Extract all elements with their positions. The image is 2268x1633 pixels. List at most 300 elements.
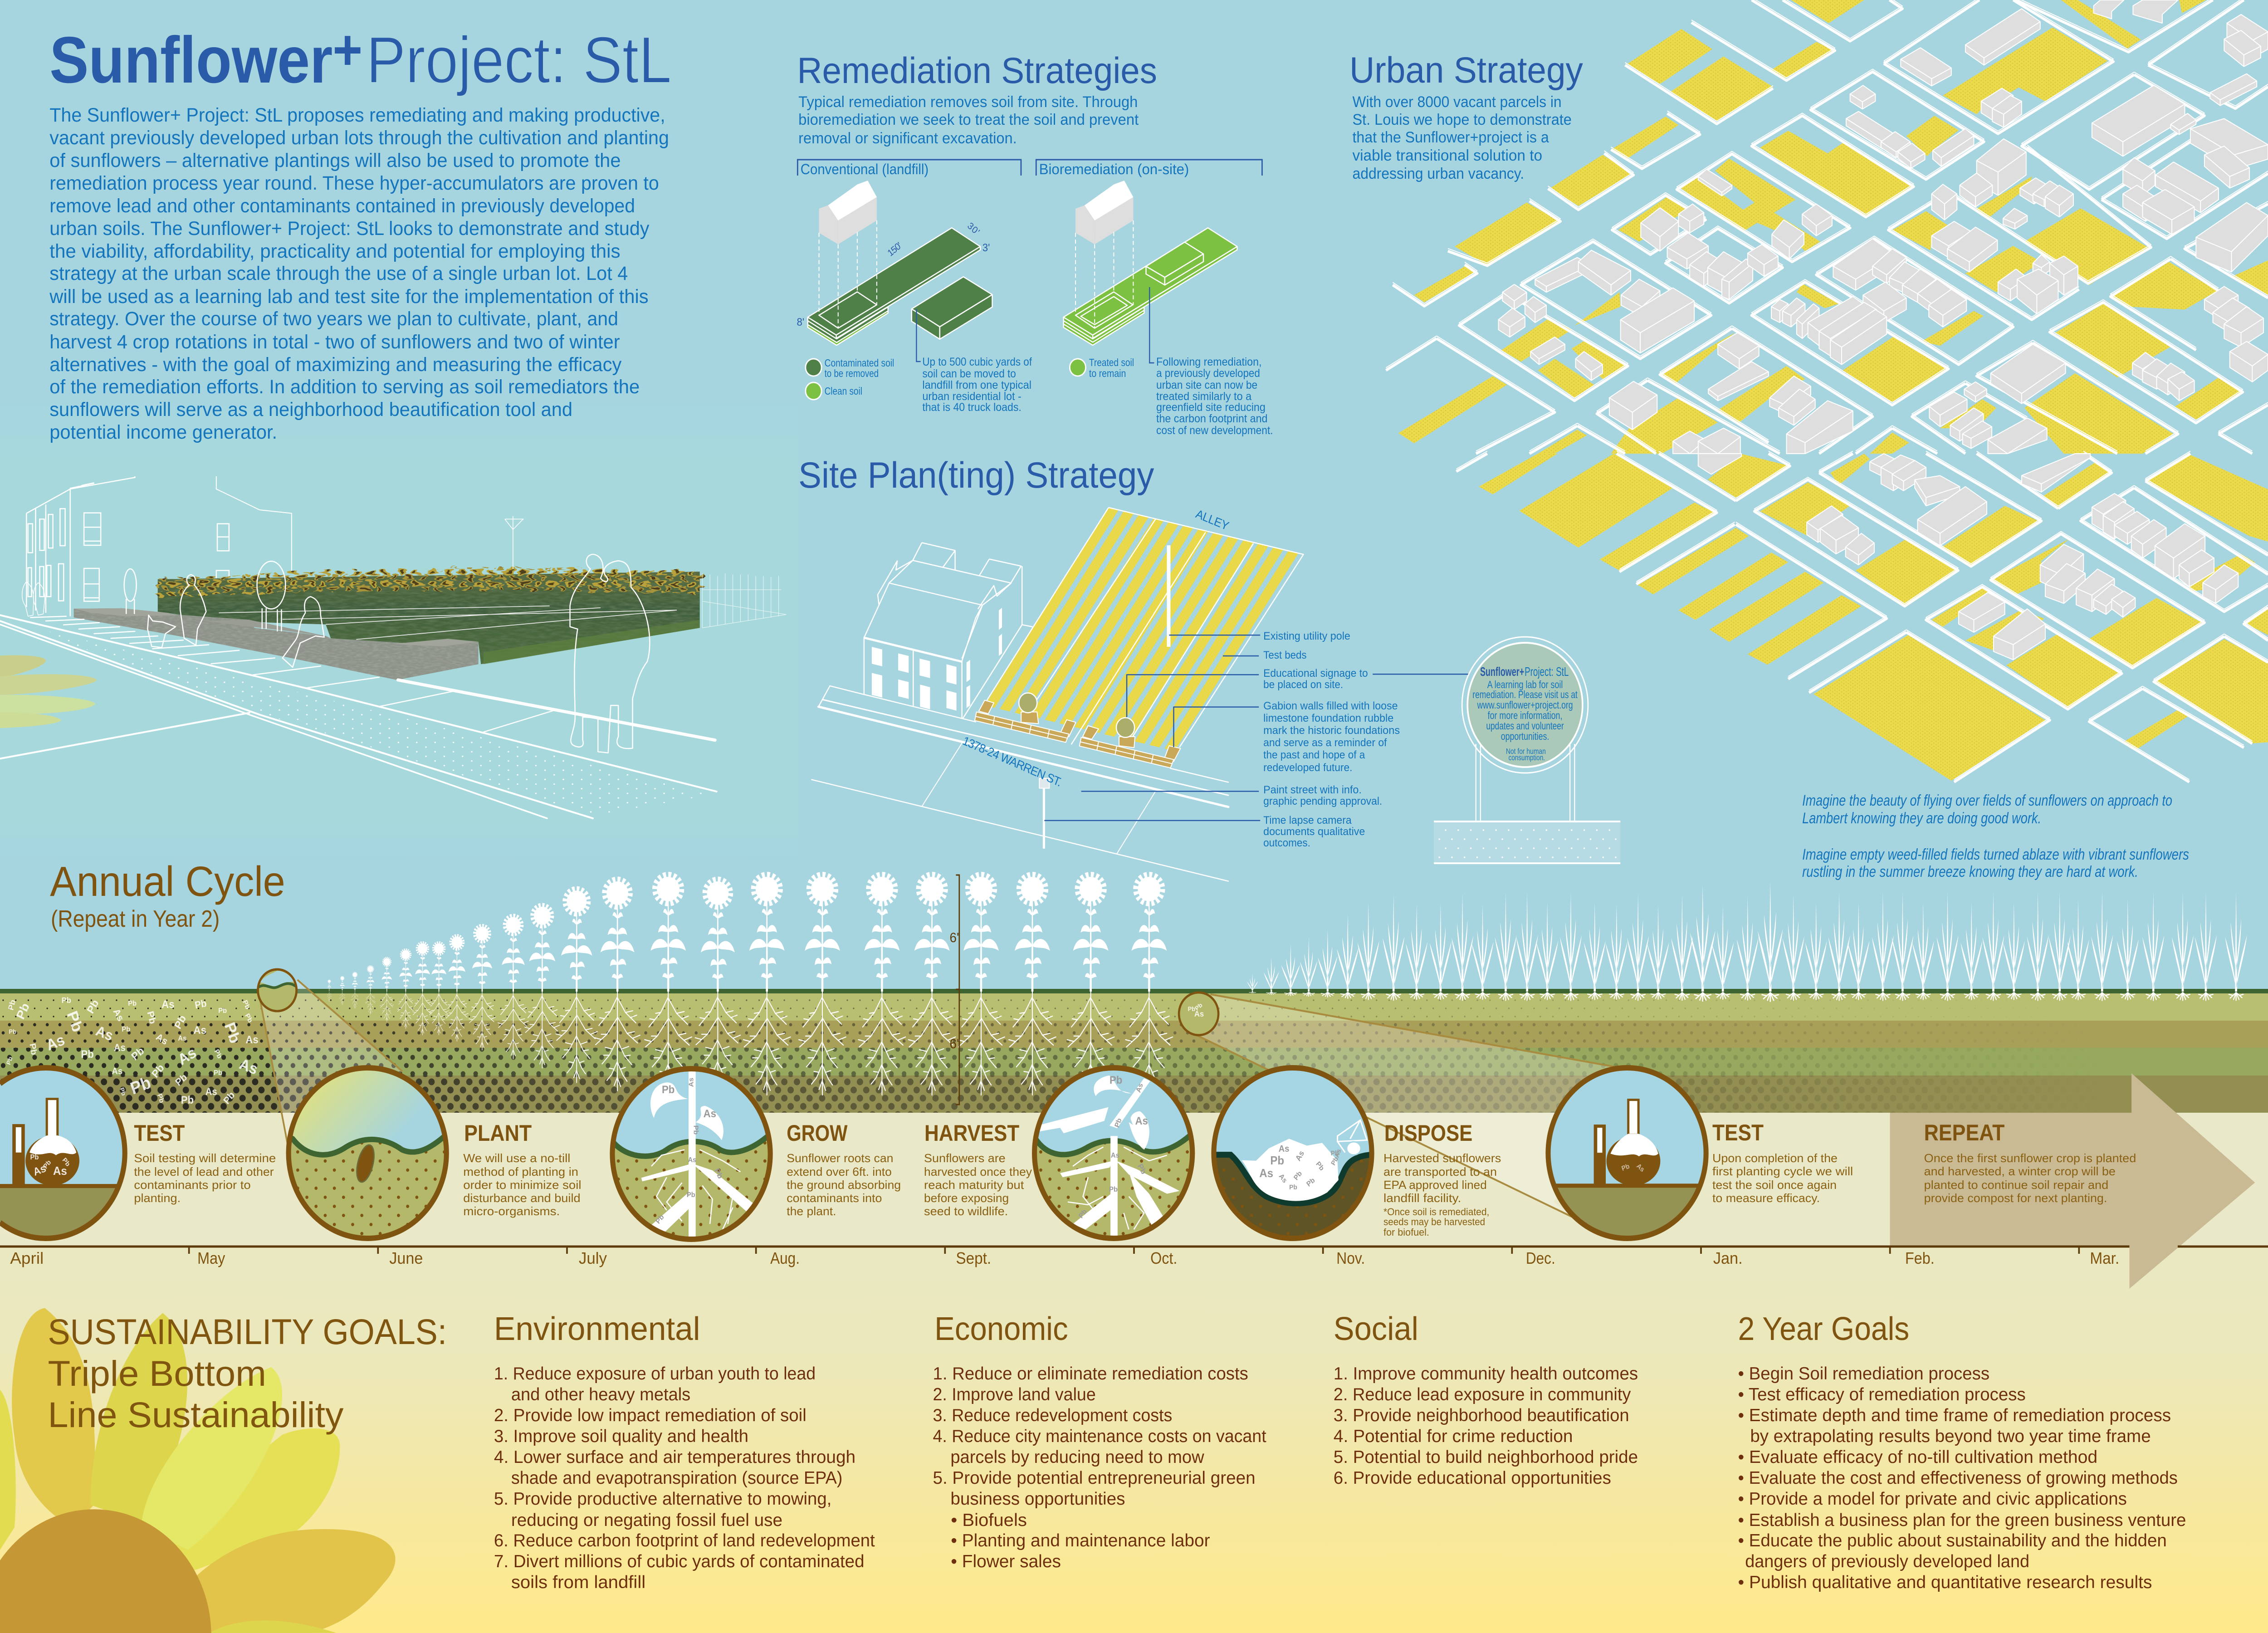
timeline: Feb. [1905, 1250, 1935, 1267]
dispose contaminant labels: Pb [1292, 1170, 1304, 1182]
site plan annotations: Paint street with info. [1263, 783, 1362, 796]
dispose contaminant labels: Pb [1330, 1155, 1340, 1167]
step 4 text: harvested once they [924, 1165, 1032, 1178]
intro text block: strategy at the urban scale through the use of a single urban lot. Lot 4 [49, 262, 628, 284]
gabion wall [74, 608, 479, 680]
flask contaminant labels: As [1635, 1162, 1646, 1173]
title: Project: StL [366, 23, 672, 97]
contaminant labels in soil: Pb [145, 1010, 158, 1025]
buildings north [1499, 0, 2268, 454]
test beds [985, 508, 1304, 751]
contaminant labels in soil: Pb [81, 1048, 94, 1060]
conventional dimensions: 150' [886, 240, 904, 259]
grow contaminant labels: Pb [662, 1083, 675, 1095]
map south section [1457, 451, 2268, 782]
contaminant labels in soil: Pb [156, 1093, 166, 1104]
following remediation callout: urban site can now be [1156, 379, 1257, 391]
column: two year goals: • Publish qualitative and quantitative research results [1738, 1572, 2152, 1592]
site plan annotations: limestone foundation rubble [1263, 712, 1393, 724]
site plan annotations: Gabion walls filled with loose [1263, 699, 1398, 712]
timeline: Sept. [956, 1250, 991, 1267]
following remediation callout: treated similarly to a [1156, 390, 1252, 403]
remediation intro text: Typical remediation removes soil from site. Through [798, 93, 1138, 110]
column: environmental: 2. Provide low impact remediation of soil [494, 1405, 807, 1425]
intro text block: urban soils. The Sunflower+ Project: StL looks to demonstrate and study [49, 217, 650, 239]
intro text block: will be used as a learning lab and test site for the implementation of this [49, 285, 649, 307]
step 6 text: TEST [1712, 1120, 1764, 1145]
column: economic: business opportunities [950, 1489, 1125, 1508]
step 7 text [1924, 1120, 2136, 1205]
column: economic: 5. Provide potential entrepreneurial green [933, 1468, 1256, 1487]
leader lines [1044, 635, 1468, 821]
sign text: for more information, [1488, 709, 1562, 721]
contaminant labels in soil: Pb [128, 1000, 137, 1007]
grow contaminant labels: Pb [713, 1167, 725, 1180]
band for cycle steps [0, 1113, 2268, 1247]
flask contaminant labels: Pb [42, 1159, 53, 1170]
small sample circle two: Pb [1194, 1002, 1204, 1012]
conventional dimensions: 30' [965, 220, 981, 237]
site plan annotations: Test beds [1263, 649, 1307, 661]
contaminant labels in soil: Pb [172, 1013, 188, 1031]
column: social: Social [1334, 1310, 1418, 1347]
sign text: updates and volunteer [1486, 720, 1564, 732]
intro text block: The Sunflower+ Project: StL proposes remediating and making productive, [49, 104, 665, 126]
site plan annotations: outcomes. [1263, 836, 1310, 849]
contaminant labels in soil: Pb [218, 1007, 227, 1015]
flask and test tube [13, 1099, 79, 1186]
intro text block: harvest 4 crop rotations in total - two of sunflowers and two of winter [49, 331, 620, 352]
column: economic: 2. Improve land value [933, 1384, 1096, 1404]
column: environmental: Environmental [494, 1310, 700, 1347]
conventional dimensions: 8' [797, 316, 804, 328]
step 3 text: extend over 6ft. into [787, 1165, 892, 1178]
utility pole [1167, 545, 1170, 647]
sunflower growth sequence [327, 877, 1173, 1095]
legend bioremediation [1070, 357, 1134, 379]
contaminant labels in soil: As [94, 1022, 115, 1044]
step 5 text: Harvested sunflowers [1383, 1152, 1501, 1165]
small sample circle two: As [1194, 1009, 1204, 1018]
house [819, 181, 877, 328]
dispose contaminant labels: Pb [1331, 1150, 1339, 1157]
vacant lots south [1479, 454, 2268, 781]
step 4 text: seed to wildlife. [924, 1205, 1008, 1218]
grow contaminant labels: Pb [692, 1125, 699, 1134]
legend conventional [806, 357, 894, 400]
flask contaminant labels: As [32, 1162, 48, 1178]
harvest contaminant labels: Pb [1110, 1074, 1122, 1086]
step 5 text: *Once soil is remediated, [1383, 1207, 1489, 1217]
contaminant labels in soil: As [154, 1032, 170, 1047]
time lapse camera [1039, 778, 1049, 849]
step 4 text: before exposing [924, 1192, 1009, 1205]
column: two year goals: • Test efficacy of remediation process [1738, 1384, 2026, 1404]
step 7 text: Once the first sunflower crop is planted [1924, 1152, 2136, 1165]
column: economic: • Flower sales [951, 1551, 1061, 1571]
harvest contaminant labels: As [1135, 1115, 1148, 1127]
step 2: plant circle [285, 1068, 448, 1243]
step 5 text: for biofuel. [1383, 1227, 1429, 1238]
timeline: Oct. [1150, 1250, 1177, 1267]
background teal wash [0, 399, 798, 862]
legend conventional: to be removed [825, 367, 879, 379]
column: social: 1. Improve community health outcomes [1334, 1364, 1638, 1383]
conventional dimensions [797, 220, 990, 328]
contaminant labels in soil: Pb [194, 998, 207, 1011]
step 2 text: disturbance and build [463, 1192, 581, 1205]
contaminant labels in soil: Pb [149, 1061, 166, 1080]
intro text block: sunflowers will serve as a neighborhood beautification tool and [49, 398, 572, 420]
street perspective illustration [0, 476, 786, 818]
dispose contaminant labels: As [1334, 1148, 1343, 1159]
column: economic [933, 1310, 1266, 1571]
urban strategy text: addressing urban vacancy. [1352, 165, 1524, 182]
timeline: June [389, 1250, 423, 1267]
repeat arrow [1890, 1073, 2255, 1289]
landfill callout: Up to 500 cubic yards of [922, 356, 1032, 368]
planter base [1434, 821, 1620, 863]
contaminant labels in soil: As [205, 1086, 217, 1097]
field guide lines [219, 606, 677, 640]
soil slab layers [808, 228, 980, 345]
sign text [1472, 665, 1578, 762]
winter crop sequence [1247, 881, 2247, 1001]
column: economic: • Biofuels [951, 1510, 1027, 1530]
urban axonometric map [1386, 0, 2268, 782]
legend bioremediation: to remain [1089, 367, 1126, 379]
dispose contaminant labels: Pb [1305, 1176, 1316, 1188]
contaminant labels in soil: Pb [128, 1073, 153, 1098]
urban strategy text: With over 8000 vacant parcels in [1352, 93, 1562, 110]
column: social: 5. Potential to build neighborhood pride [1334, 1447, 1638, 1467]
harvest contaminant labels: Pb [1077, 1208, 1089, 1220]
harvest contaminant labels: As [1111, 1152, 1119, 1159]
column: social: 3. Provide neighborhood beautification [1334, 1405, 1629, 1425]
street lines [811, 625, 1228, 881]
fence of distant plants [702, 573, 786, 628]
contaminant labels in soil: As [114, 1042, 126, 1053]
imagine text: Imagine the beauty of flying over fields of sunflowers on approach to [1802, 792, 2172, 809]
sign text: Not for human [1506, 746, 1546, 756]
column: economic: 4. Reduce city maintenance costs on vacant [933, 1426, 1266, 1446]
remediation intro text: bioremediation we seek to treat the soil and prevent [798, 111, 1139, 128]
urban strategy text: St. Louis we hope to demonstrate [1352, 111, 1572, 128]
column: economic: 1. Reduce or eliminate remediation costs [933, 1364, 1248, 1383]
background sand gradient [0, 1113, 2268, 1633]
educational signs [1019, 693, 1135, 748]
magnifier cone: soil sample to plant [259, 980, 402, 1156]
ground [0, 1188, 115, 1236]
column: two year goals: • Evaluate the cost and effectiveness of growing methods [1738, 1468, 2178, 1487]
landfill callout: urban residential lot - [922, 390, 1022, 403]
timeline: Jan. [1713, 1250, 1743, 1267]
step 7 text: and harvested, a winter crop will be [1924, 1165, 2116, 1178]
sidewalk dots [15, 623, 713, 815]
column: two year goals: • Educate the public about sustainability and the hidden [1738, 1530, 2167, 1550]
title [49, 18, 672, 97]
timeline: Aug. [770, 1250, 800, 1267]
column: environmental [494, 1310, 875, 1592]
contaminant labels in soil: Pb [129, 1044, 146, 1063]
timeline: Dec. [1526, 1250, 1555, 1267]
sign text: remediation. Please visit us at [1472, 689, 1578, 700]
step 5: dispose circle [1213, 1068, 1372, 1246]
step 6 text: to measure efficacy. [1712, 1192, 1820, 1205]
contaminant labels in soil: As [194, 1024, 206, 1036]
remediation intro text [798, 93, 1139, 147]
sign illustration [1462, 637, 1588, 821]
step 5 text: landfill facility. [1383, 1192, 1461, 1205]
contaminant labels in soil: As [112, 1066, 122, 1076]
urban strategy text [1352, 93, 1572, 182]
contaminant labels in soil [5, 995, 260, 1106]
contaminant labels in soil: As [175, 1043, 199, 1068]
contaminant labels in soil: Pb [28, 1043, 39, 1056]
harvest contaminant labels: Pb [1136, 1162, 1149, 1176]
intro text block: strategy. Over the course of two years we plan to cultivate, plant, and [49, 308, 618, 329]
contaminant labels in soil: As [178, 1035, 186, 1042]
height dimension: 6' [950, 930, 959, 945]
intro text block: the viability, affordability, practicality and potential for employing this [49, 240, 621, 262]
timeline: April [10, 1250, 44, 1267]
contaminant labels in soil: Pb [6, 999, 17, 1011]
soil pile returned [1146, 242, 1203, 285]
step 4 text: HARVEST [924, 1120, 1019, 1146]
excavated soil block [912, 277, 992, 339]
magnifier cone: harvested soil to test [1198, 994, 1618, 1219]
column: social: 2. Reduce lead exposure in community [1334, 1384, 1631, 1404]
site plan annotations: the past and hope of a [1263, 748, 1365, 761]
contaminant labels in soil: Pb [62, 995, 71, 1005]
sign text: consumption. [1508, 753, 1545, 762]
step 1 text: contaminants prior to [134, 1178, 251, 1192]
contaminant labels in soil: Pb [5, 1056, 14, 1066]
heading: annual cycle: Annual Cycle [50, 858, 285, 905]
site plan annotations: be placed on site. [1263, 678, 1343, 690]
street outlines south [1457, 451, 2268, 782]
sunflower centre [0, 1509, 211, 1633]
grow contaminant labels [655, 1078, 725, 1225]
harvest contaminant labels [1077, 1074, 1149, 1220]
grow contaminant labels: Pb [655, 1213, 665, 1225]
contaminant labels in soil: Pb [241, 999, 251, 1011]
landfill callout: landfill from one typical [922, 379, 1031, 391]
signs and utility pole [124, 516, 523, 631]
step 3 text [787, 1120, 901, 1218]
step 3 text: Sunflower roots can [787, 1152, 893, 1165]
timeline: May [197, 1250, 225, 1267]
dispose contaminant labels: As [1259, 1167, 1273, 1180]
step 7 text: REPEAT [1924, 1120, 2004, 1145]
intro text block: potential income generator. [49, 421, 277, 443]
following remediation callout: cost of new development. [1156, 424, 1273, 437]
contaminant labels in soil: Pb [181, 1094, 194, 1106]
vacant lots north [1398, 0, 2268, 454]
step 6 text: test the soil once again [1712, 1178, 1837, 1192]
contaminant labels in soil: Pb [213, 1048, 223, 1060]
heading: annual cycle: (Repeat in Year 2) [51, 905, 220, 932]
legend conventional: Contaminated soil [825, 357, 894, 369]
following remediation callout [1149, 287, 1273, 437]
step 5 text: EPA approved lined [1383, 1178, 1487, 1192]
column: social [1334, 1310, 1638, 1487]
dispose contaminant labels: As [1277, 1172, 1289, 1184]
building outline [26, 476, 292, 616]
site plan annotations [1263, 630, 1400, 849]
intro text block: vacant previously developed urban lots through the cultivation and planting [49, 127, 669, 148]
site plan annotations: Educational signage to [1263, 667, 1368, 679]
street outlines north [1386, 0, 2268, 454]
title: + [332, 18, 362, 82]
step 3: grow circle [611, 1069, 771, 1246]
step 6: test circle [1546, 1068, 1709, 1242]
dispose contaminant labels: As [1294, 1149, 1306, 1163]
buildings south [1698, 454, 2238, 660]
flask contaminant labels: Pb [1621, 1163, 1631, 1173]
title: Sunflower [49, 23, 332, 97]
soil pile [1242, 1139, 1339, 1201]
column: environmental: 7. Divert millions of cubic yards of contaminated [494, 1551, 865, 1571]
intro text block: remediation process year round. These hyper-accumulators are proven to [49, 172, 659, 194]
column: two year goals: 2 Year Goals [1738, 1310, 1909, 1347]
heading: annual cycle [50, 858, 285, 932]
grow contaminant labels: Pb [687, 1191, 695, 1199]
brackets and sub-headings [797, 160, 1262, 177]
step 2 text [463, 1120, 581, 1218]
harvest contaminant labels: As [1135, 1082, 1145, 1094]
site plan drawing [811, 508, 1468, 881]
sign text: Sunflower+ [1480, 665, 1524, 679]
column: environmental: reducing or negating fossil fuel use [511, 1510, 782, 1530]
step 5 text: are transported to an [1383, 1165, 1497, 1178]
dispose contaminant labels: Pb [1270, 1154, 1284, 1167]
following remediation callout: the carbon footprint and [1156, 412, 1267, 425]
column: two year goals: • Evaluate efficacy of no-till cultivation method [1738, 1447, 2097, 1467]
step 1 text: Soil testing will determine [134, 1152, 276, 1165]
treated soil slab [1064, 228, 1237, 345]
column: environmental: 5. Provide productive alternative to mowing, [494, 1489, 831, 1508]
faint flower petals [0, 655, 97, 728]
dispose contaminant labels: Pb [1289, 1184, 1297, 1191]
sign text: opportunities. [1501, 730, 1549, 742]
column: economic: parcels by reducing need to mow [950, 1447, 1205, 1467]
step 3 text: the ground absorbing [787, 1178, 901, 1192]
heading: site planting strategy: Site Plan(ting) Strategy [798, 454, 1154, 496]
following remediation callout: greenfield site reducing [1156, 401, 1266, 414]
seed [353, 1143, 377, 1184]
harvest contaminant labels: Pb [1109, 1186, 1118, 1193]
step 2 text: micro-organisms. [463, 1205, 560, 1218]
dispose contaminant labels [1259, 1144, 1343, 1191]
sustainability heading: Triple Bottom [48, 1354, 266, 1394]
alley label: ALLEY [1194, 507, 1231, 533]
dispose contaminant labels: As [1279, 1144, 1289, 1154]
flask contaminant labels: As [53, 1164, 67, 1178]
column: economic: • Planting and maintenance labor [951, 1530, 1210, 1550]
landfill callout [916, 309, 1032, 414]
column: social: 6. Provide educational opportunities [1334, 1468, 1611, 1487]
step 5 text: DISPOSE [1384, 1120, 1472, 1146]
step 3 text: the plant. [787, 1205, 836, 1218]
site plan annotations: and serve as a reminder of [1263, 736, 1387, 748]
contaminant labels in soil: As [111, 1007, 126, 1023]
brackets and sub-headings: Bioremediation (on-site) [1039, 161, 1189, 177]
column: environmental: 4. Lower surface and air temperatures through [494, 1447, 855, 1467]
step 6 text: Upon completion of the [1712, 1152, 1838, 1165]
timeline: Mar. [2090, 1250, 2119, 1267]
landfill callout: soil can be moved to [922, 367, 1016, 380]
column: social: 4. Potential for crime reduction [1334, 1426, 1573, 1446]
house windows [872, 608, 1002, 711]
contaminant labels in soil: Pb [222, 1090, 237, 1106]
landfill callout: that is 40 truck loads. [922, 401, 1022, 414]
sign text: Project: StL [1525, 665, 1569, 679]
height dimension [950, 875, 959, 1105]
contaminant labels in soil: Pb [85, 997, 101, 1016]
flask contaminant labels: Pb [30, 1154, 39, 1161]
step 1 text: planting. [134, 1192, 181, 1205]
flask contaminant labels [30, 1154, 71, 1178]
timeline: July [579, 1250, 607, 1267]
column: environmental: 6. Reduce carbon footprint of land redevelopment [494, 1530, 875, 1550]
site plan annotations: redeveloped future. [1263, 761, 1352, 773]
dispose contaminant labels: Pb [1314, 1160, 1325, 1172]
imagine text: Lambert knowing they are doing good work. [1802, 809, 2041, 826]
step 1 text [134, 1120, 276, 1205]
step 7 text: planted to continue soil repair and [1924, 1178, 2108, 1192]
site plan annotations: graphic pending approval. [1263, 795, 1382, 807]
column: environmental: and other heavy metals [511, 1384, 690, 1404]
contaminant labels in soil: Pb [174, 1072, 189, 1088]
column: two year goals: • Establish a business plan for the green business venture [1738, 1510, 2186, 1530]
contaminant labels in soil: Pb [122, 1026, 130, 1033]
step 3 text: contaminants into [787, 1192, 882, 1205]
step 4 text: Sunflowers are [924, 1152, 1006, 1165]
contaminant labels in soil: Pb [64, 1009, 86, 1034]
column: two year goals [1738, 1310, 2186, 1592]
legend bioremediation: Treated soil [1089, 357, 1134, 368]
following remediation callout: a previously developed [1156, 367, 1260, 380]
step 2 text: We will use a no-till [463, 1152, 570, 1165]
step 2 text: PLANT [464, 1120, 532, 1146]
sign text: www.sunflower+project.org [1477, 699, 1573, 711]
step 4 text [924, 1120, 1032, 1218]
contaminant labels in soil: Pb [243, 1012, 254, 1024]
step 5 text [1383, 1120, 1501, 1238]
site plan annotations: mark the historic foundations [1263, 724, 1400, 736]
legend conventional: Clean soil [825, 385, 862, 397]
conventional dimensions: 3' [982, 241, 990, 254]
contaminant labels in soil: As [161, 998, 175, 1010]
step 1 text: TEST [134, 1120, 185, 1146]
step 2 text: method of planting in [463, 1165, 578, 1178]
column: economic: 3. Reduce redevelopment costs [933, 1405, 1172, 1425]
column: environmental: soils from landfill [511, 1572, 645, 1592]
map north section [1386, 0, 2268, 454]
urban strategy text: viable transitional solution to [1352, 147, 1542, 164]
intro text block: remove lead and other contaminants contained in previously developed [49, 195, 635, 216]
intro text block: of the remediation efforts. In addition to serving as soil remediators the [49, 376, 640, 397]
timeline: Nov. [1336, 1250, 1365, 1267]
imagine text: Imagine empty weed-filled fields turned ablaze with vibrant sunflowers [1802, 846, 2189, 863]
column: environmental: shade and evapotranspiration (source EPA) [511, 1468, 842, 1487]
column: two year goals: by extrapolating results beyond two year time frame [1750, 1426, 2151, 1446]
harvest contaminant labels: Pb [1113, 1117, 1123, 1129]
timeline [0, 1247, 2268, 1267]
step 2 text: order to minimize soil [463, 1178, 581, 1192]
house [1075, 181, 1133, 328]
